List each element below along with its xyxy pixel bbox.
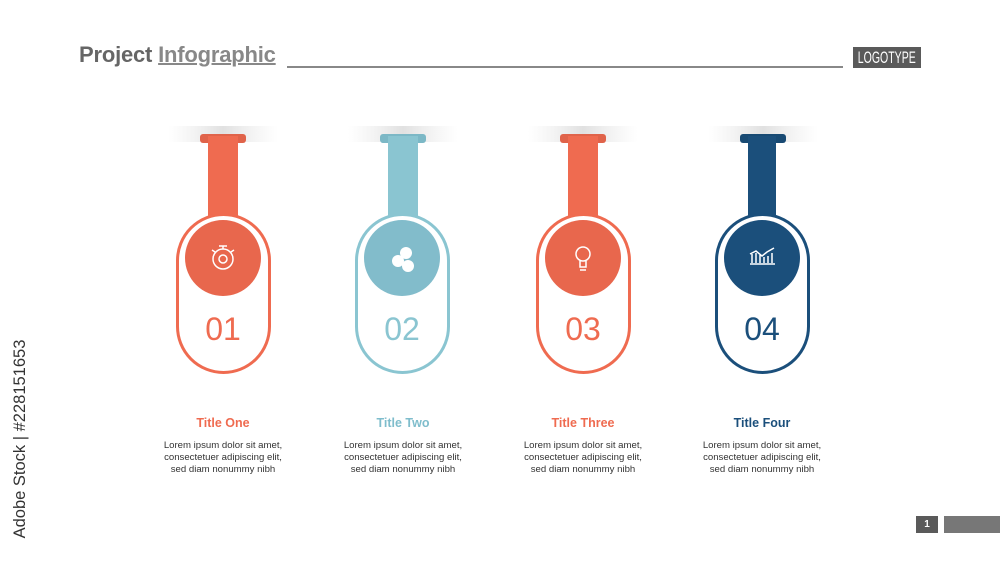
title three: Title Three (552, 416, 614, 430)
body two (344, 440, 462, 475)
body three (524, 440, 642, 475)
page number (916, 516, 938, 533)
body three: sed diam nonummy nibh (531, 464, 635, 475)
tag 1: 01 (205, 311, 241, 347)
body one: consectetuer adipiscing elit, (164, 452, 282, 463)
side stock label: Adobe Stock | #228151653 (11, 340, 29, 538)
tag 2 (348, 126, 458, 372)
title two: Title Two (376, 416, 430, 430)
tag 1 (168, 126, 278, 372)
title: Project Infographic (79, 42, 276, 67)
body three: Lorem ipsum dolor sit amet, (524, 440, 642, 451)
footer bar (944, 516, 1000, 533)
body four: sed diam nonummy nibh (710, 464, 814, 475)
header line (287, 66, 843, 68)
body two: Lorem ipsum dolor sit amet, (344, 440, 462, 451)
tag 3 (528, 126, 638, 372)
body one (164, 440, 282, 475)
title one: Title One (196, 416, 250, 430)
title four: Title Four (734, 416, 790, 430)
tag 4: 04 (744, 311, 780, 347)
body three: consectetuer adipiscing elit, (524, 452, 642, 463)
page number: 1 (924, 519, 930, 530)
tag 2: 02 (384, 311, 420, 347)
body four: Lorem ipsum dolor sit amet, (703, 440, 821, 451)
body one: Lorem ipsum dolor sit amet, (164, 440, 282, 451)
body four: consectetuer adipiscing elit, (703, 452, 821, 463)
body two: consectetuer adipiscing elit, (344, 452, 462, 463)
tag 3: 03 (565, 311, 601, 347)
body four (703, 440, 821, 475)
tag 4 (708, 126, 818, 372)
body one: sed diam nonummy nibh (171, 464, 275, 475)
logotype: LOGOTYPE (858, 48, 916, 67)
body two: sed diam nonummy nibh (351, 464, 455, 475)
